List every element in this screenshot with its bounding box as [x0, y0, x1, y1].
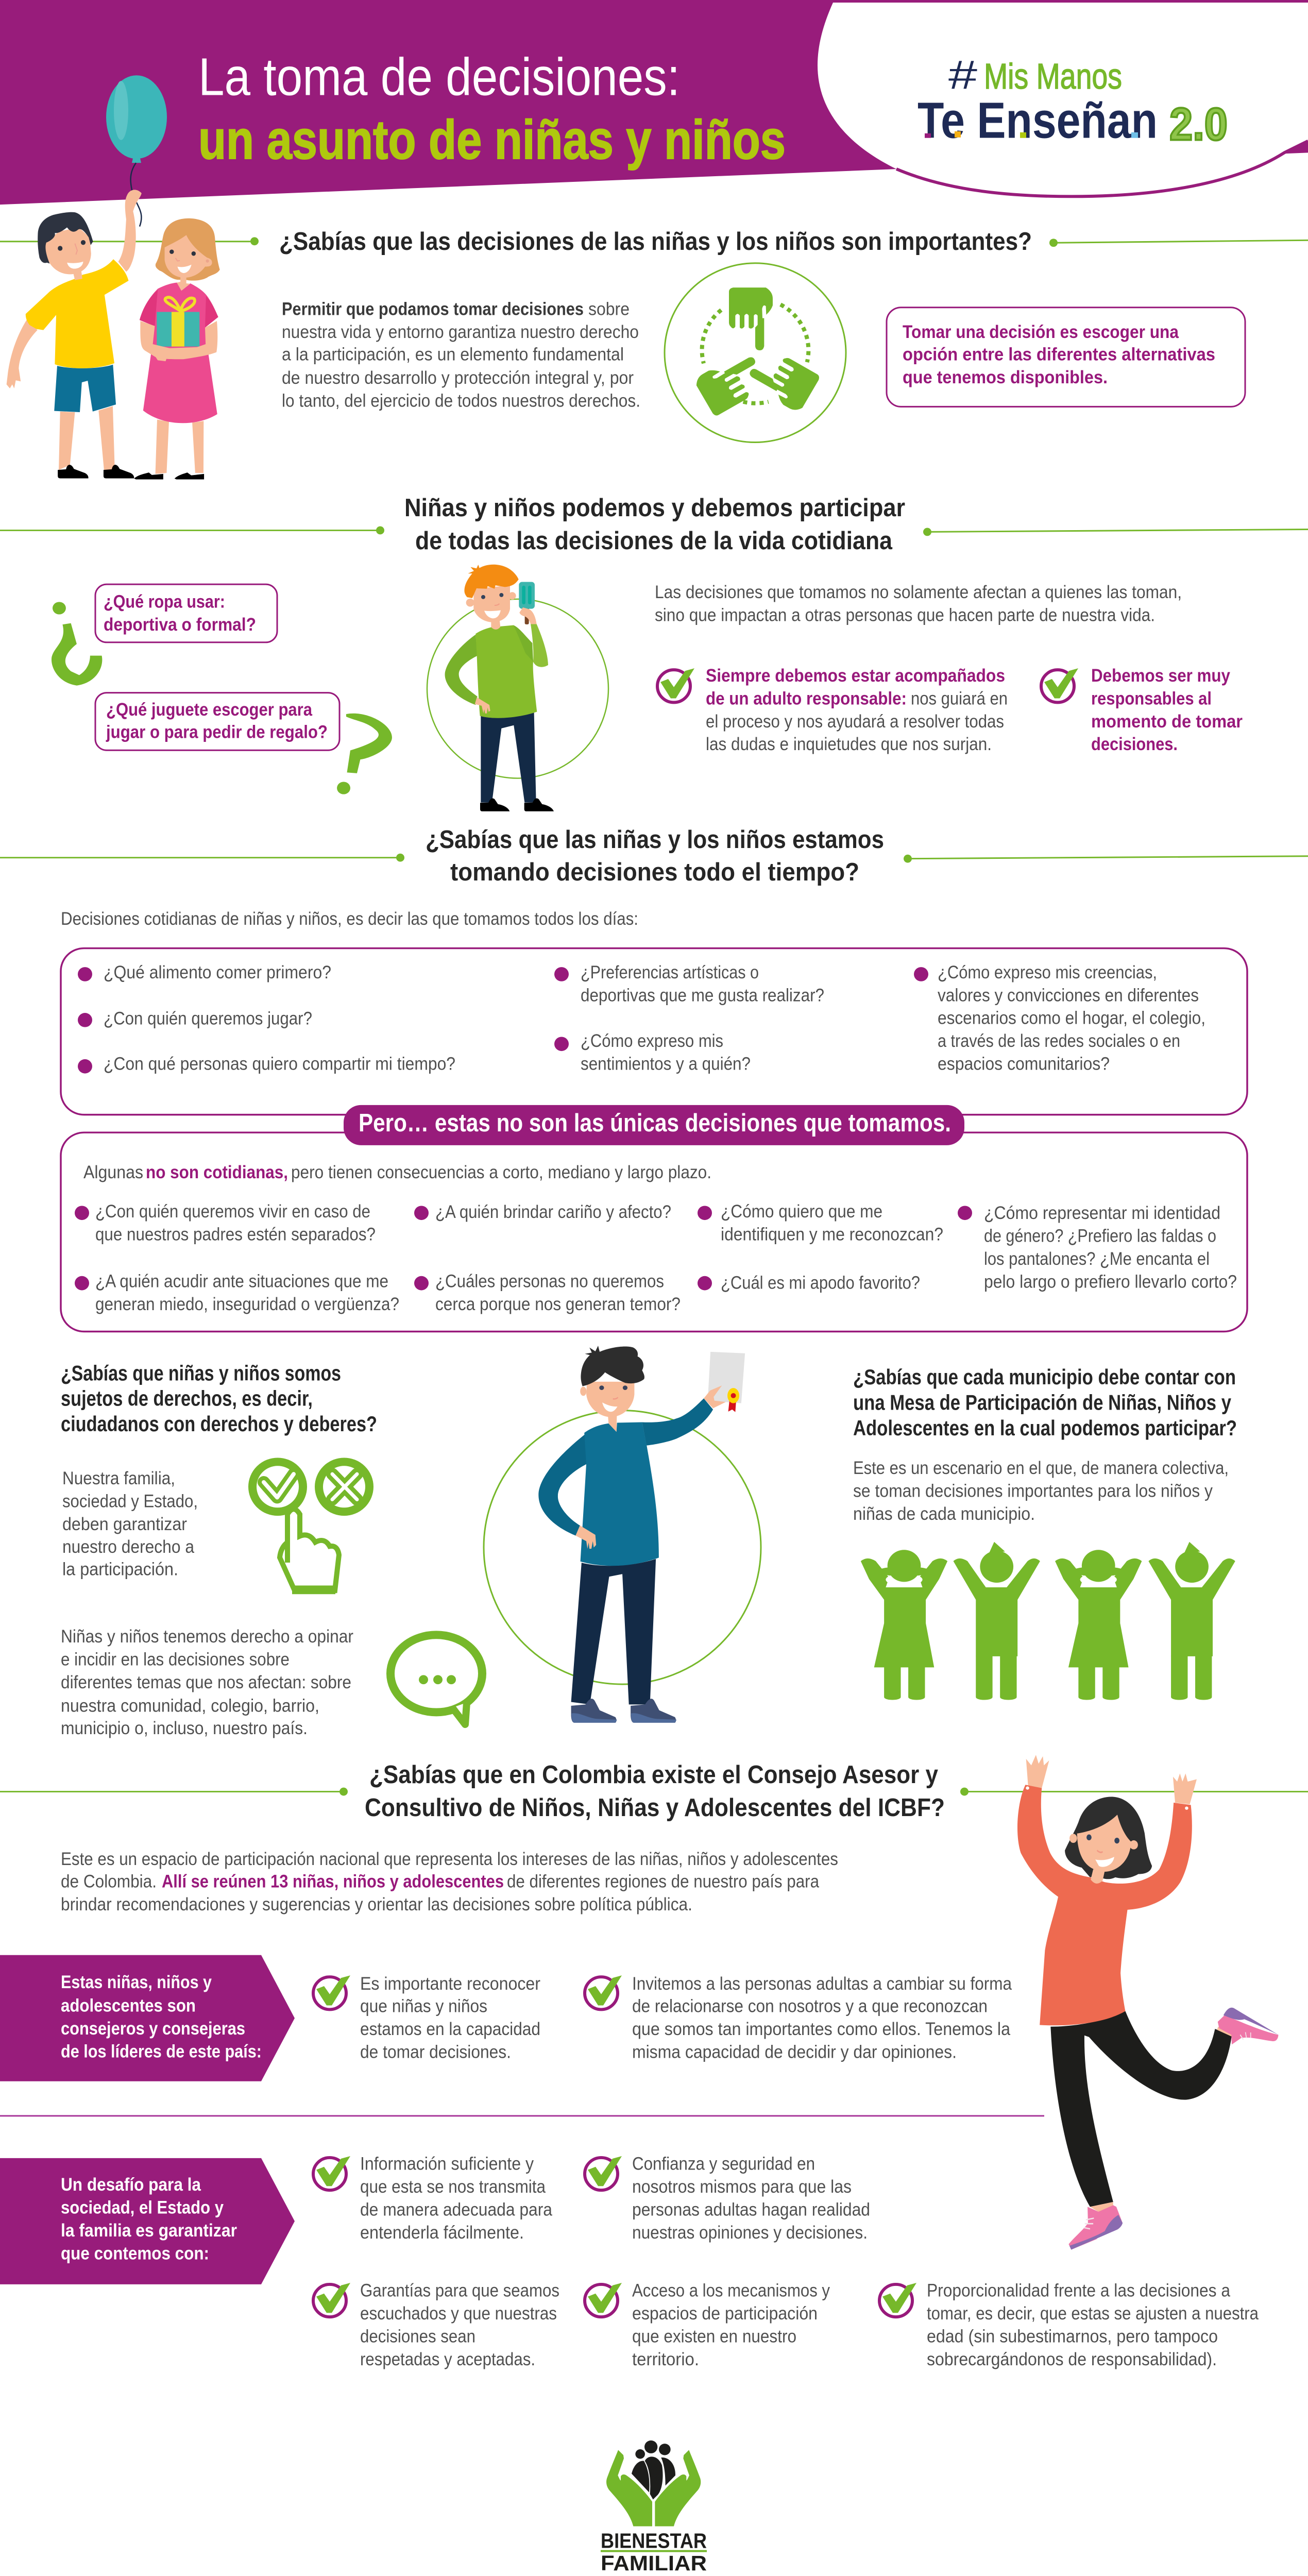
text: siempre debemos: Siempre debemos estar acompañados [706, 665, 1005, 686]
text: invitemos a las personas adultas: que somos tan importantes como ellos. Tenemos la [632, 2019, 1010, 2039]
text: invitemos a las personas adultas [632, 1973, 1012, 2062]
title: un asunto de niñas y niños [198, 109, 786, 171]
text: acceso a los mecanismos: Acceso a los mecanismos y [632, 2280, 830, 2301]
text: siempre debemos: de un adulto responsable: [706, 688, 907, 708]
panel: non-everyday decisions: Algunas [83, 1162, 143, 1182]
callout: que juguete escoger [95, 693, 339, 750]
text: invitemos a las personas adultas: misma capacidad de decidir y dar opiniones. [632, 2041, 957, 2062]
text: permitir que podamos: nuestra vida y entorno garantiza nuestro derecho [282, 321, 639, 342]
section 2 rule right [923, 528, 1308, 536]
section 1 rule right [1049, 239, 1308, 247]
callout: tomar una decision: que tenemos disponibles. [903, 367, 1108, 387]
banner arrow: un desafio: Un desafío para la [61, 2174, 201, 2195]
panel: everyday decisions: valores y convicciones en diferentes [938, 985, 1199, 1005]
callout: que ropa usar: ¿Qué ropa usar: [104, 591, 225, 612]
panel: non-everyday decisions: ¿Cómo representar mi identidad [984, 1202, 1220, 1223]
text: acceso a los mecanismos [632, 2280, 830, 2369]
banner: pero estas no son las unicas [344, 1105, 964, 1145]
banner arrow: un desafio: la familia es garantizar [61, 2220, 237, 2241]
text: nuestra familia: la participación. [62, 1559, 178, 1580]
text: este es un escenario: Este es un escenario en el que, de manera colectiva, [853, 1458, 1229, 1478]
text: este es un espacio: de diferentes regiones de nuestro país para [507, 1871, 819, 1891]
panel: non-everyday decisions: ¿A quién acudir ante situaciones que me [95, 1271, 388, 1291]
panel: non-everyday decisions: cerca porque nos generan temor? [435, 1294, 681, 1314]
title: La toma de decisiones: [198, 47, 680, 107]
panel: non-everyday decisions: generan miedo, inseguridad o vergüenza? [95, 1294, 399, 1314]
text: confianza y seguridad: nuestras opiniones y decisiones. [632, 2222, 868, 2243]
panel: non-everyday decisions [61, 1132, 1247, 1331]
logo: Bienestar Familiar: BIENESTAR [601, 2529, 707, 2553]
text: permitir que podamos: sobre [588, 299, 630, 319]
banner arrow: consejeros: adolescentes son [61, 1995, 196, 2015]
text: garantias [360, 2280, 559, 2369]
heading: consejo asesor: Consultivo de Niños, Niñas y Adolescentes del ICBF? [365, 1793, 945, 1822]
text: nuestra familia: deben garantizar [62, 1514, 187, 1534]
heading: section 1: ¿Sabías que las decisiones de las niñas y los niños son importantes? [279, 227, 1032, 256]
panel: non-everyday decisions: los pantalones? ¿Me encanta el [984, 1248, 1210, 1269]
title [198, 47, 786, 171]
logo: Mis Manos Te Enseñan 2.0: Mis Manos [984, 56, 1122, 96]
text: proporcionalidad: tomar, es decir, que estas se ajusten a nuestra [927, 2303, 1259, 2324]
panel: everyday decisions: ¿Cómo expreso mis creencias, [938, 962, 1157, 982]
icon: question mark [337, 714, 392, 794]
panel: non-everyday decisions: ¿Con quién queremos vivir en caso de [95, 1201, 370, 1222]
icon: three hands in circle [665, 263, 846, 443]
logo: Mis Manos Te Enseñan 2.0: # [948, 52, 977, 97]
text: permitir que podamos: de nuestro desarrollo y protección integral y, por [282, 367, 634, 388]
text: informacion suficiente: de manera adecuada para [360, 2199, 552, 2219]
text: garantias: Garantías para que seamos [360, 2280, 559, 2301]
text: decisiones cotidianas intro: Decisiones cotidianas de niñas y niños, es decir las que tomamos todos los días: [61, 908, 638, 929]
heading: consejo asesor: ¿Sabías que en Colombia existe el Consejo Asesor y [369, 1760, 938, 1789]
section 5 rule left [0, 1788, 348, 1795]
icon: four children silhouettes [861, 1542, 1235, 1700]
text: permitir que podamos [282, 299, 640, 411]
heading: sujetos de derechos: ¿Sabías que niñas y niños somos [61, 1361, 341, 1385]
section 3 rule left [0, 854, 404, 862]
panel: non-everyday decisions: pelo largo o prefiero llevarlo corto? [984, 1272, 1237, 1292]
text: nuestra familia: Nuestra familia, [62, 1468, 175, 1488]
text: este es un escenario: se toman decisiones importantes para los niños y [853, 1481, 1213, 1501]
logo: Mis Manos Te Enseñan 2.0: Te Enseñan [918, 92, 1158, 149]
text: garantias: decisiones sean [360, 2326, 475, 2346]
panel: everyday decisions: ¿Cómo expreso mis [581, 1030, 723, 1051]
callout: que juguete escoger: ¿Qué juguete escoger para [106, 699, 313, 720]
text: derecho a opinar: e incidir en las decisiones sobre [61, 1649, 290, 1670]
text: permitir que podamos: a la participación, es un elemento fundamental [282, 344, 624, 364]
text: garantias: respetadas y aceptadas. [360, 2349, 535, 2369]
text: siempre debemos: el proceso y nos ayudará a resolver todas [706, 711, 1004, 732]
text: confianza y seguridad: nosotros mismos para que las [632, 2176, 852, 2197]
text: nuestra familia [62, 1468, 198, 1580]
icon: check [585, 1975, 622, 2009]
text: acceso a los mecanismos: espacios de participación [632, 2303, 818, 2324]
heading: consejo asesor [365, 1760, 945, 1822]
section 1 rule left [0, 237, 259, 245]
icon: check [879, 2283, 916, 2317]
icon: yes or no choice with pointing hand [252, 1462, 369, 1594]
heading: mesa de participacion [853, 1365, 1237, 1440]
header band [0, 0, 1308, 205]
text: invitemos a las personas adultas: de relacionarse con nosotros y a que reconozcan [632, 1996, 988, 2016]
banner arrow: consejeros: Estas niñas, niños y [61, 1972, 212, 1992]
text: proporcionalidad: sobrecargándonos de responsabilidad). [927, 2349, 1217, 2369]
banner arrow: consejeros: de los líderes de este país: [61, 2041, 262, 2061]
text: las decisiones que tomamos [655, 582, 1182, 625]
text: este es un espacio: brindar recomendaciones y sugerencias y orientar las decisiones sobre política pública. [61, 1894, 692, 1914]
text: informacion suficiente: entenderla fácilmente. [360, 2222, 524, 2243]
text: las decisiones que tomamos: Las decisiones que tomamos no solamente afectan a quienes las toman, [655, 582, 1182, 602]
text: este es un escenario [853, 1458, 1229, 1524]
icon: check [313, 2283, 350, 2317]
text: debemos ser muy responsables [1091, 665, 1243, 754]
section 3 rule right [904, 855, 1308, 863]
panel: everyday decisions: deportivas que me gusta realizar? [581, 985, 824, 1005]
section 5 rule right [960, 1788, 1308, 1795]
text: siempre debemos [706, 665, 1008, 754]
text: nuestra familia: nuestro derecho a [62, 1536, 194, 1557]
banner: pero estas no son las unicas: Pero… estas no son las únicas decisiones que tomamos. [359, 1108, 951, 1137]
icon: check [1041, 668, 1078, 702]
text: derecho a opinar: municipio o, incluso, nuestro país. [61, 1718, 308, 1738]
heading: section 3 [426, 825, 884, 886]
icon: check [657, 668, 694, 702]
callout: tomar una decision [887, 308, 1245, 406]
banner arrow: consejeros: consejeros y consejeras [61, 2018, 245, 2039]
boy raised arm [118, 190, 142, 272]
text: proporcionalidad: edad (sin subestimarnos, pero tampoco [927, 2326, 1218, 2346]
heading: mesa de participacion: ¿Sabías que cada municipio debe contar con [853, 1365, 1236, 1389]
character: boy with popsicle [427, 565, 608, 811]
text: derecho a opinar [61, 1626, 353, 1738]
heading: section 3: tomando decisiones todo el tiempo? [450, 857, 859, 886]
icon: inverted question mark [52, 602, 102, 686]
text: este es un espacio: Allí se reúnen 13 niñas, niños y adolescentes [162, 1871, 504, 1891]
text: acceso a los mecanismos: que existen en nuestro [632, 2326, 796, 2346]
text: derecho a opinar: Niñas y niños tenemos derecho a opinar [61, 1626, 353, 1647]
text: es importante reconocer: Es importante reconocer [360, 1973, 540, 1994]
panel: everyday decisions [61, 948, 1247, 1115]
section 2 rule left [0, 527, 384, 534]
panel: non-everyday decisions: que nuestros padres estén separados? [95, 1224, 376, 1245]
panel: everyday decisions: ¿Con quién queremos jugar? [104, 1008, 312, 1029]
heading: mesa de participacion: una Mesa de Participación de Niñas, Niños y [853, 1391, 1231, 1415]
callout: que ropa usar: deportiva o formal? [104, 614, 256, 635]
text: nuestra familia: sociedad y Estado, [62, 1491, 198, 1511]
panel: everyday decisions: ¿Con qué personas quiero compartir mi tiempo? [104, 1054, 455, 1074]
banner arrow: consejeros [0, 1955, 295, 2081]
text: debemos ser muy responsables: responsables al [1091, 688, 1212, 708]
icon: check [313, 1975, 350, 2009]
logo: Mis Manos Te Enseñan 2.0 [918, 52, 1228, 150]
icon: balloon [106, 75, 167, 227]
callout: tomar una decision: Tomar una decisión es escoger una [903, 321, 1179, 342]
panel: non-everyday decisions: identifiquen y me reconozcan? [721, 1224, 943, 1245]
panel: non-everyday decisions: ¿Cuáles personas no queremos [435, 1271, 664, 1291]
text: es importante reconocer: estamos en la capacidad [360, 2019, 540, 2039]
text: confianza y seguridad: personas adultas hagan realidad [632, 2199, 870, 2219]
heading: sujetos de derechos: ciudadanos con derechos y deberes? [61, 1412, 377, 1436]
heading: sujetos de derechos: sujetos de derechos, es decir, [61, 1386, 313, 1411]
text: informacion suficiente: Información suficiente y [360, 2154, 534, 2174]
character: boy and girl [7, 190, 220, 479]
text: es importante reconocer: que niñas y niños [360, 1996, 487, 2016]
callout: que ropa usar [95, 584, 277, 642]
text: acceso a los mecanismos: territorio. [632, 2349, 699, 2369]
text: invitemos a las personas adultas: Invitemos a las personas adultas a cambiar su forma [632, 1973, 1012, 1994]
text: debemos ser muy responsables: Debemos ser muy [1091, 665, 1230, 686]
panel: everyday decisions: escenarios como el hogar, el colegio, [938, 1008, 1205, 1028]
panel: non-everyday decisions: pero tienen consecuencias a corto, mediano y largo plazo. [291, 1162, 711, 1182]
text: confianza y seguridad: Confianza y seguridad en [632, 2154, 815, 2174]
text: informacion suficiente: que esta se nos transmita [360, 2176, 546, 2197]
heading: sujetos de derechos [61, 1361, 377, 1436]
heading: section 2: Niñas y niños podemos y debemos participar [404, 493, 905, 522]
panel: everyday decisions: espacios comunitarios? [938, 1054, 1110, 1074]
panel: non-everyday decisions: ¿A quién brindar cariño y afecto? [435, 1201, 671, 1222]
text: es importante reconocer: de tomar decisiones. [360, 2041, 511, 2062]
text: este es un espacio [61, 1849, 838, 1914]
logo: Bienestar Familiar: FAMILIAR [601, 2551, 707, 2575]
heading: section 2 [404, 493, 905, 555]
panel: everyday decisions: a través de las redes sociales o en [938, 1030, 1180, 1051]
heading: mesa de participacion: Adolescentes en la cual podemos participar? [853, 1416, 1237, 1440]
heading: section 2: de todas las decisiones de la vida cotidiana [415, 526, 892, 555]
icon: check [585, 2156, 622, 2190]
text: este es un espacio: Este es un espacio de participación nacional que representa los intereses de las niñas, niños y adolescentes [61, 1849, 838, 1869]
girl [156, 419, 203, 474]
banner arrow: un desafio: que contemos con: [61, 2243, 209, 2263]
callout: que juguete escoger: jugar o para pedir de regalo? [106, 722, 328, 742]
text: proporcionalidad: Proporcionalidad frente a las decisiones a [927, 2280, 1230, 2301]
panel: non-everyday decisions: ¿Cómo quiero que me [721, 1201, 882, 1222]
text: debemos ser muy responsables: momento de tomar [1091, 711, 1243, 732]
text: siempre debemos: las dudas e inquietudes que nos surjan. [706, 734, 992, 754]
text: permitir que podamos: Permitir que podamos tomar decisiones [282, 299, 584, 319]
text: es importante reconocer [360, 1973, 540, 2062]
character: young man with diploma [484, 1346, 761, 1723]
text: siempre debemos: nos guiará en [911, 688, 1008, 708]
banner arrow: un desafio: sociedad, el Estado y [61, 2197, 224, 2218]
text: las decisiones que tomamos: sino que impactan a otras personas que hacen parte de nuestra vida. [655, 604, 1155, 625]
text: derecho a opinar: diferentes temas que nos afectan: sobre [61, 1672, 351, 1692]
text: confianza y seguridad [632, 2154, 870, 2243]
icon: check [585, 2283, 622, 2317]
text: este es un espacio: de Colombia. [61, 1871, 157, 1891]
panel: non-everyday decisions: ¿Cuál es mi apodo favorito? [721, 1273, 920, 1293]
callout: tomar una decision: opción entre las diferentes alternativas [903, 344, 1215, 364]
banner arrow: un desafio [0, 2158, 295, 2284]
text: informacion suficiente [360, 2154, 552, 2243]
logo: Bienestar Familiar [601, 2441, 707, 2575]
character: jumping girl [1017, 1755, 1279, 2250]
logo: Mis Manos Te Enseñan 2.0: 2.0 [1169, 98, 1228, 150]
text: debemos ser muy responsables: decisiones. [1091, 734, 1178, 754]
text: permitir que podamos: lo tanto, del ejercicio de todos nuestros derechos. [282, 391, 640, 411]
panel: non-everyday decisions: no son cotidianas, [146, 1162, 288, 1182]
panel: non-everyday decisions: de género? ¿Prefiero las faldas o [984, 1226, 1216, 1246]
text: este es un escenario: niñas de cada municipio. [853, 1503, 1035, 1524]
icon: check [313, 2156, 350, 2190]
panel: everyday decisions: ¿Preferencias artísticas o [581, 962, 759, 982]
text: derecho a opinar: nuestra comunidad, colegio, barrio, [61, 1696, 319, 1716]
text: garantias: escuchados y que nuestras [360, 2303, 557, 2324]
text: proporcionalidad [927, 2280, 1259, 2369]
panel: everyday decisions: sentimientos y a quién? [581, 1054, 751, 1074]
heading: section 3: ¿Sabías que las niñas y los niños estamos [426, 825, 884, 854]
icon: speech bubble [390, 1635, 482, 1724]
panel: everyday decisions: ¿Qué alimento comer primero? [104, 962, 331, 982]
